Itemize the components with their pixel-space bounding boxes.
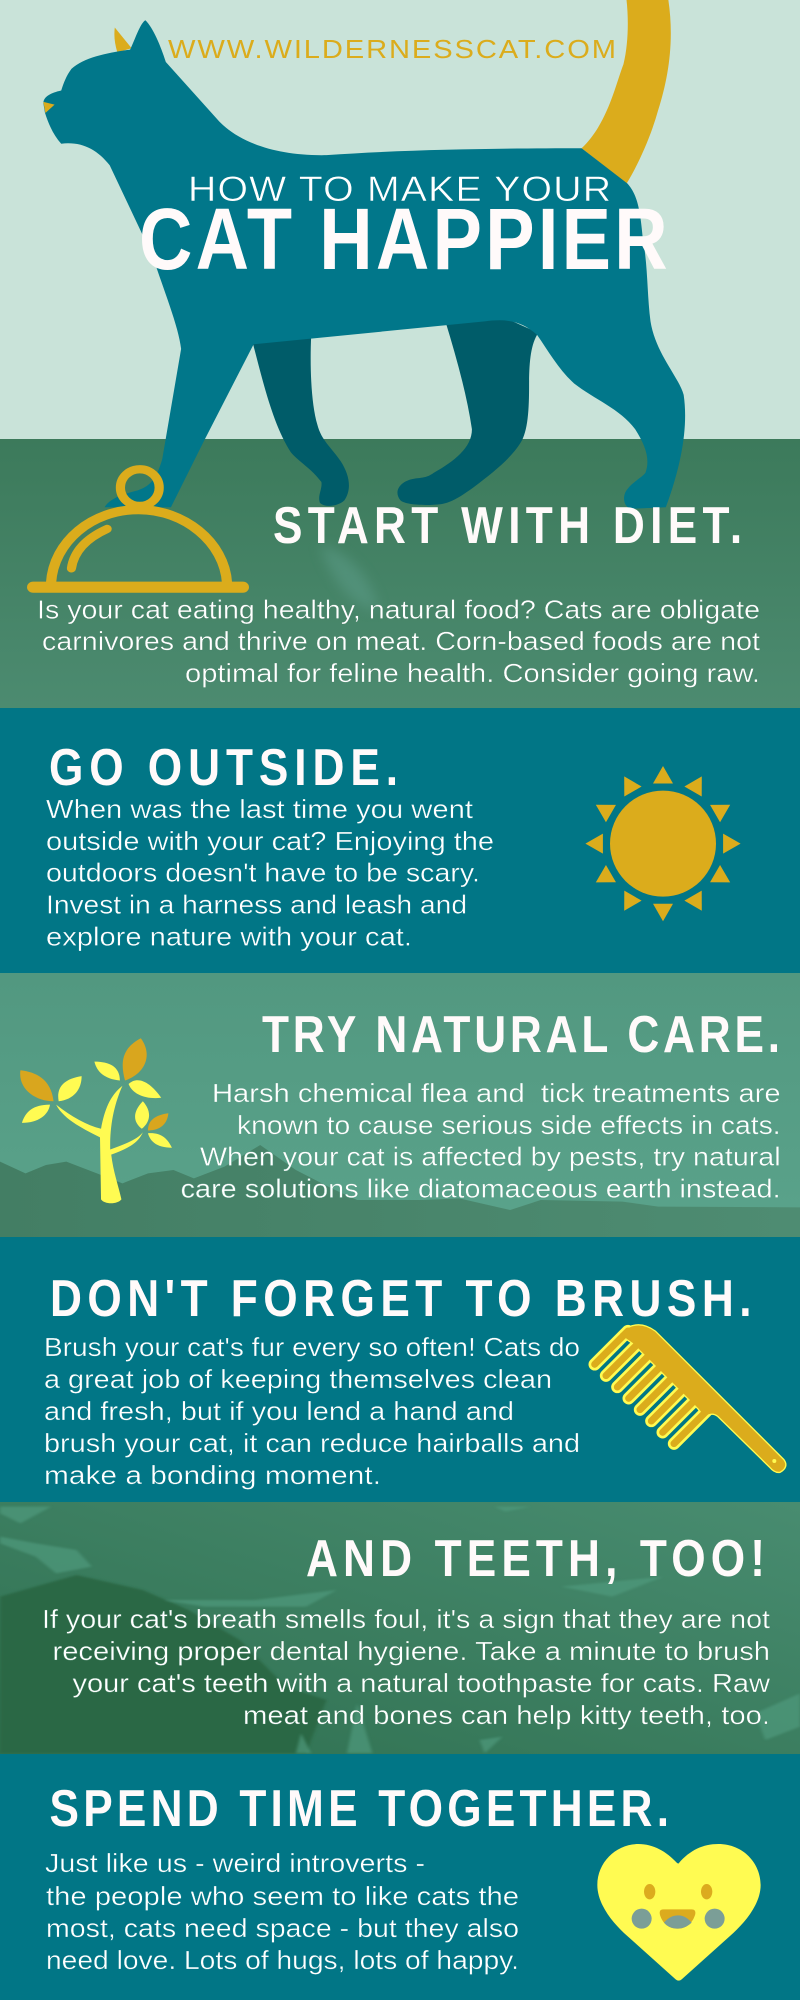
heading: DON'T FORGET TO BRUSH.: [50, 1270, 752, 1328]
body text: outside with your cat? Enjoying the: [46, 826, 494, 856]
body text: need love. Lots of hugs, lots of happy.: [46, 1945, 519, 1975]
section: and teeth, too: [0, 1502, 800, 1754]
panel background: [0, 1502, 800, 1754]
landscape: [0, 1507, 800, 1753]
section: try natural care: [0, 973, 800, 1237]
title line two: CAT HAPPIER: [139, 191, 668, 288]
panel: sky header background: [0, 0, 800, 440]
mountains: [0, 1145, 800, 1237]
body text: your cat's teeth with a natural toothpaste for cats. Raw: [72, 1668, 770, 1698]
body text: Is your cat eating healthy, natural food? Cats are obligate: [37, 594, 760, 624]
cat body: [43, 20, 685, 509]
cat illustration: [43, 0, 685, 509]
icon: comb: [595, 1326, 785, 1472]
body text: a great job of keeping themselves clean: [44, 1364, 552, 1394]
body text: Harsh chemical flea and tick treatments are: [212, 1078, 781, 1108]
heading: TRY NATURAL CARE.: [262, 1006, 780, 1064]
body text: the people who seem to like cats the: [46, 1881, 519, 1911]
website url: WWW.WILDERNESSCAT.COM: [168, 34, 616, 64]
panel background: [0, 1237, 800, 1502]
body text: carnivores and thrive on meat. Corn-based foods are not: [42, 626, 761, 656]
cat back leg left: [253, 335, 349, 506]
body text: make a bonding moment.: [44, 1460, 381, 1490]
body text: care solutions like diatomaceous earth instead.: [181, 1174, 781, 1204]
body text: If your cat's breath smells foul, it's a sign that they are not: [42, 1604, 771, 1634]
cat far ear: [114, 28, 132, 52]
body text: explore nature with your cat.: [46, 922, 412, 952]
body text: When was the last time you went: [46, 794, 474, 824]
body text: [37, 594, 761, 688]
section: start with diet: [33, 469, 761, 688]
section: spend time together: [0, 1754, 800, 2000]
body text: [42, 1604, 771, 1730]
title line one: HOW TO MAKE YOUR: [188, 169, 611, 209]
heading: START WITH DIET.: [273, 497, 742, 555]
panel background: [0, 1754, 800, 2000]
body text: known to cause serious side effects in cats.: [237, 1110, 781, 1140]
body text: most, cats need space - but they also: [46, 1913, 519, 1943]
body text: [181, 1078, 781, 1204]
panel: diet ground background: [0, 439, 800, 708]
body text: brush your cat, it can reduce hairballs and: [44, 1428, 580, 1458]
cat tail: [582, 0, 671, 184]
cat nose: [43, 102, 55, 113]
icon: sun: [585, 766, 741, 921]
heading: AND TEETH, TOO!: [306, 1530, 765, 1588]
panel background: [0, 708, 800, 973]
heading: SPEND TIME TOGETHER.: [50, 1780, 669, 1838]
icon: smiling heart: [597, 1844, 761, 1981]
section: don't forget to brush: [0, 1237, 800, 1502]
body text: [46, 794, 494, 952]
body text: Invest in a harness and leash and: [46, 890, 467, 920]
body text: and fresh, but if you lend a hand and: [44, 1396, 514, 1426]
section: go outside: [0, 708, 800, 973]
heading: GO OUTSIDE.: [49, 739, 398, 797]
body text: [45, 1848, 519, 1975]
body text: optimal for feline health. Consider going raw.: [185, 658, 760, 688]
title: [139, 169, 668, 288]
body text: When your cat is affected by pests, try natural: [200, 1142, 781, 1172]
body text: outdoors doesn't have to be scary.: [46, 858, 480, 888]
body text: receiving proper dental hygiene. Take a minute to brush: [52, 1636, 770, 1666]
body text: [44, 1332, 580, 1490]
body text: meat and bones can help kitty teeth, too.: [243, 1700, 770, 1730]
body text: Brush your cat's fur every so often! Cats do: [44, 1332, 580, 1362]
body text: Just like us - weird introverts -: [45, 1848, 425, 1878]
icon: tree: [20, 1038, 172, 1203]
icon: food cloche: [33, 469, 243, 587]
cat back leg right: [397, 317, 538, 505]
panel background: [0, 973, 800, 1237]
